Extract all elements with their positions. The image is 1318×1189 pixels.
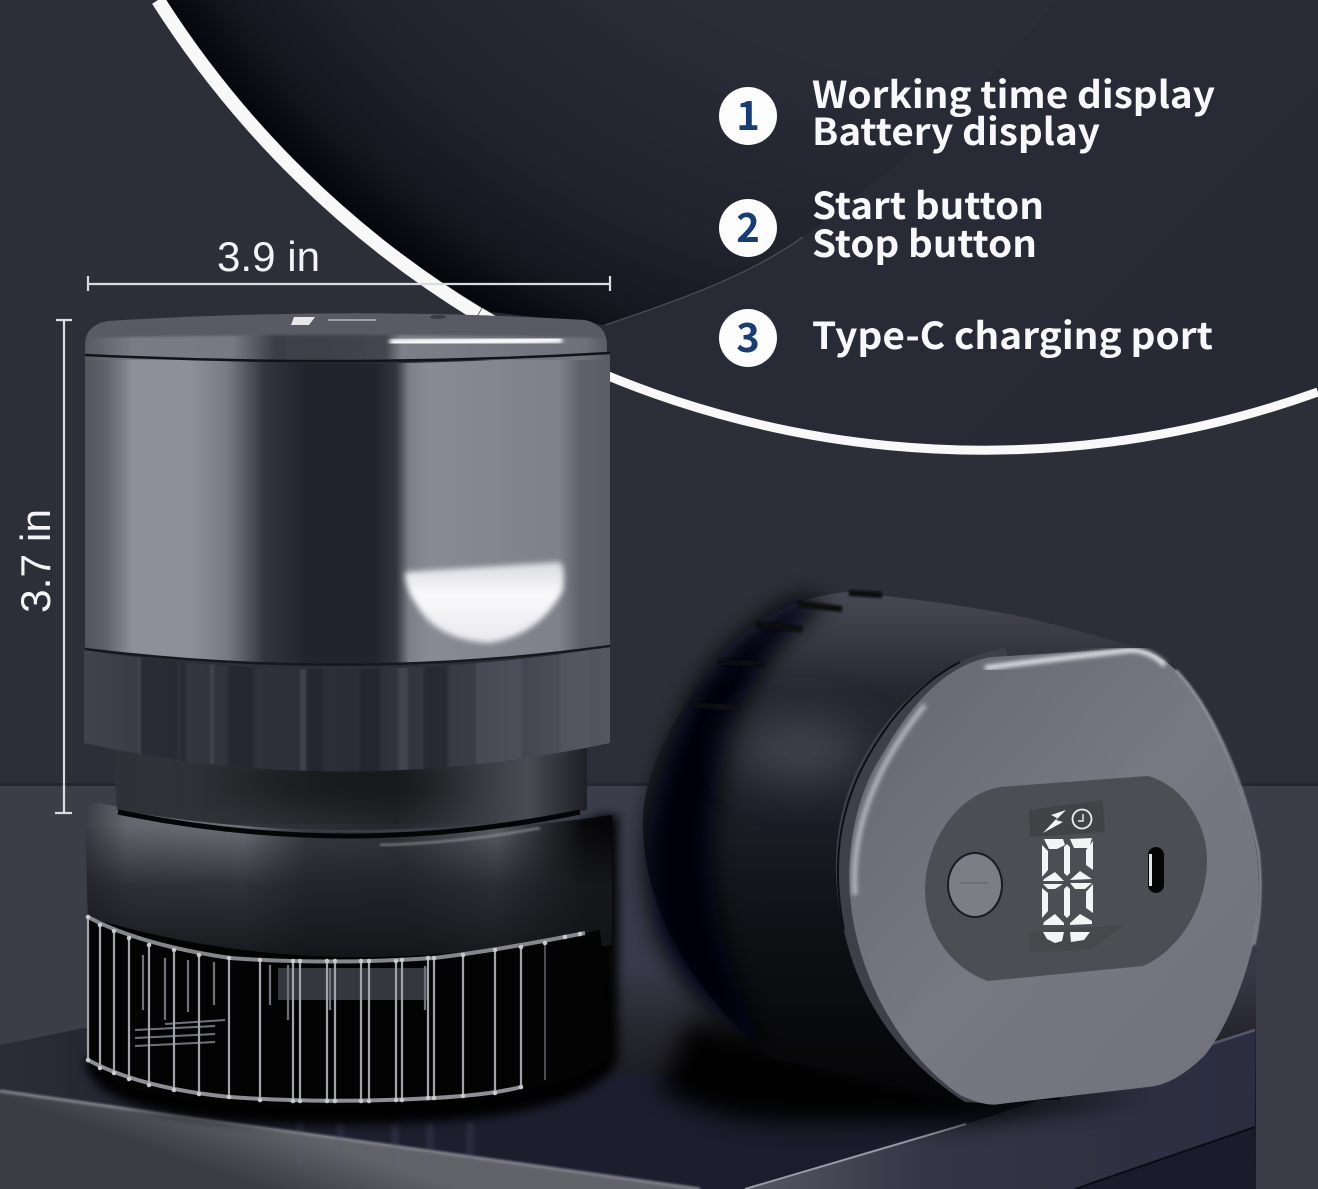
label 1 — [812, 65, 1215, 156]
band ridges — [690, 593, 882, 708]
right strip — [1256, 786, 1318, 1189]
fan cage — [88, 917, 612, 1106]
badge 2 — [719, 196, 777, 257]
side sheen — [735, 720, 865, 780]
cage bottom rail — [88, 1060, 521, 1101]
white arc lower — [480, 312, 1318, 450]
cap seam — [85, 353, 610, 361]
label 1: Battery display — [812, 102, 1100, 156]
cage reflection — [300, 1120, 470, 1170]
legend item 1 — [719, 65, 1215, 156]
middle floor — [500, 786, 1270, 1189]
icon: clock — [1072, 810, 1092, 828]
neck — [113, 745, 587, 836]
badge 2: 2 — [736, 196, 760, 254]
cylinder body — [85, 352, 610, 665]
icon: bolt — [1043, 810, 1066, 833]
cap highlight — [390, 339, 562, 343]
inner bars — [143, 955, 425, 1020]
width dimension line — [88, 233, 610, 291]
base housing — [85, 803, 612, 961]
floor — [0, 783, 1318, 1189]
badge 3: 3 — [736, 306, 760, 364]
label 2 — [812, 176, 1044, 268]
end face — [849, 649, 1258, 1105]
lcd digits — [1042, 838, 1093, 943]
height label: 3.7 in — [12, 509, 59, 613]
label 3: Type-C charging port — [812, 306, 1213, 360]
label 2: Stop button — [812, 214, 1037, 268]
badge 1 — [719, 84, 777, 145]
dark swoosh — [163, 0, 1055, 325]
logo mark — [291, 317, 376, 325]
knurled ring — [84, 647, 610, 780]
corner below platform — [1075, 1127, 1255, 1189]
product: device on its side — [643, 592, 1260, 1122]
ring ridges — [138, 658, 520, 771]
product: upright device — [84, 313, 612, 1106]
fan blades — [135, 1020, 225, 1046]
cage bars — [88, 917, 521, 1101]
ground shadow — [660, 1020, 1150, 1122]
left device shadow — [85, 815, 618, 1125]
label 1: Working time display — [812, 65, 1215, 119]
control pill — [925, 776, 1207, 981]
icon strip — [1029, 800, 1105, 837]
thin swoosh edge — [605, 237, 803, 325]
rim — [836, 648, 1100, 1104]
wedge foreground — [0, 1090, 700, 1189]
legend item 2 — [719, 176, 1044, 268]
rim seam — [838, 662, 960, 930]
platform side face — [745, 1030, 1255, 1189]
badge 3 — [719, 306, 777, 367]
height dimension line — [12, 320, 72, 813]
usb-c port — [1148, 847, 1164, 893]
lcd reflection — [1030, 925, 1125, 952]
platform lower edge — [1075, 1127, 1255, 1189]
seam — [85, 646, 610, 665]
platform edge highlight — [745, 1124, 966, 1189]
wedge edge highlight — [0, 1091, 700, 1189]
legend item 3 — [719, 306, 1213, 367]
background circle panel — [0, 0, 1318, 452]
platform right edge — [1205, 1030, 1255, 1046]
cage window — [278, 968, 428, 1000]
cage top rail — [88, 917, 585, 962]
glare — [405, 562, 564, 643]
start/stop button — [947, 852, 1003, 918]
white arc upper — [158, 0, 478, 314]
side body — [643, 592, 1143, 1100]
rim reflection — [854, 705, 925, 895]
platform top surface — [0, 1028, 1000, 1189]
cage beads — [88, 917, 580, 1101]
knurled band shadow — [647, 596, 830, 1058]
face edge highlight — [1176, 670, 1260, 945]
label 2: Start button — [812, 176, 1044, 230]
platform — [0, 1028, 1255, 1189]
camera dot — [430, 315, 446, 319]
face top highlight — [985, 650, 1165, 668]
badge 1: 1 — [736, 84, 760, 142]
cap — [85, 313, 610, 365]
width label: 3.9 in — [217, 233, 320, 280]
